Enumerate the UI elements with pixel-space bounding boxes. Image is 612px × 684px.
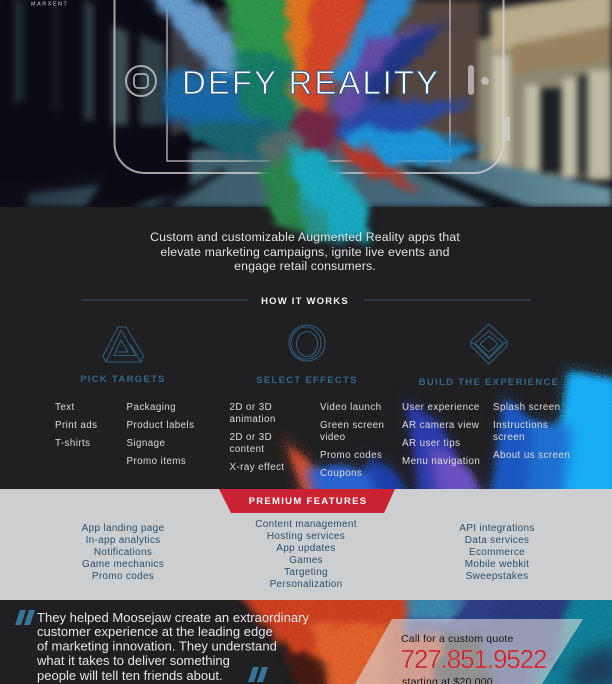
list: premium left: Promo codes xyxy=(92,571,154,582)
testimonial quote: of marketing innovation. They understand xyxy=(37,638,277,654)
list: pick targets: T-shirts xyxy=(55,438,90,449)
headings: steps: PICK TARGETS xyxy=(80,374,166,385)
testimonial quote: what it takes to deliver something xyxy=(36,653,230,668)
list: select effects: animation xyxy=(230,414,276,425)
testimonial quote: They helped Moosejaw create an extraordinary xyxy=(37,610,309,625)
list: select effects: content xyxy=(230,444,265,455)
phone camera and side button xyxy=(468,65,510,141)
list: premium right: Ecommerce xyxy=(469,547,525,558)
list: select effects: 2D or 3D xyxy=(230,432,272,443)
intro text: elevate marketing campaigns, ignite live events and xyxy=(160,245,450,259)
callout text: Call for a custom quote xyxy=(401,633,514,645)
list: pick targets: Packaging xyxy=(126,402,176,413)
list: pick targets: Print ads xyxy=(55,420,97,431)
list: build the experience: About us screen xyxy=(493,450,570,461)
list: build the experience: User experience xyxy=(402,402,480,413)
list: pick targets: Promo items xyxy=(126,456,186,467)
callout text xyxy=(400,633,548,684)
list: premium center: Content management xyxy=(255,519,357,530)
banner: premium features xyxy=(219,489,395,513)
list: select effects: Promo codes xyxy=(320,450,382,461)
headings: steps xyxy=(80,374,559,388)
list: premium center: App updates xyxy=(276,543,336,554)
list: premium left: Game mechanics xyxy=(82,559,164,570)
list: build the experience: Splash screen xyxy=(493,402,561,413)
banner: premium features: PREMIUM FEATURES xyxy=(249,496,367,507)
footer powder background xyxy=(236,600,612,684)
powder explosion xyxy=(138,0,482,242)
list: premium right: Sweepstakes xyxy=(466,571,528,582)
testimonial quote xyxy=(36,610,309,683)
testimonial quote: customer experience at the leading edge xyxy=(37,624,273,639)
testimonial quote: people will tell ten friends about. xyxy=(37,668,223,683)
list: build the experience xyxy=(402,402,570,467)
list: pick targets: Text xyxy=(55,402,75,413)
list: select effects: Green screen xyxy=(320,420,384,431)
phone outline xyxy=(114,0,504,173)
list: build the experience: Menu navigation xyxy=(402,456,480,467)
hero street photo xyxy=(0,0,612,207)
intro text xyxy=(150,230,460,273)
panel: premium features xyxy=(0,489,612,600)
headings: steps: BUILD THE EXPERIENCE xyxy=(419,377,559,388)
list: premium left: App landing page xyxy=(82,523,164,534)
list: select effects: Video launch xyxy=(320,402,382,413)
phone number: 727.851.9522 xyxy=(400,644,548,674)
powder splash behind lists xyxy=(280,368,612,500)
title: Defy Reality: DEFY REALITY xyxy=(182,64,438,101)
list: premium center: Targeting xyxy=(284,567,328,578)
list: select effects xyxy=(230,402,384,479)
list: pick targets: Signage xyxy=(126,438,166,449)
list: select effects: video xyxy=(320,432,346,443)
list: premium center: Hosting services xyxy=(267,531,345,542)
callout panel xyxy=(355,619,583,684)
list: premium center: Games xyxy=(289,555,323,566)
list: build the experience: screen xyxy=(493,432,525,443)
list: select effects: 2D or 3D xyxy=(230,402,272,413)
intro text: engage retail consumers. xyxy=(234,259,376,273)
headings: steps: SELECT EFFECTS xyxy=(256,375,358,386)
list: build the experience: Instructions xyxy=(493,420,548,431)
icon: concentric rings xyxy=(289,325,325,361)
intro text: Custom and customizable Augmented Reality apps that xyxy=(150,230,460,244)
heading: how it works: HOW IT WORKS xyxy=(261,296,349,307)
list: premium left: Notifications xyxy=(94,547,152,558)
list: premium center: Personalization xyxy=(270,579,342,590)
list: select effects: X-ray effect xyxy=(230,462,284,473)
list: pick targets xyxy=(55,402,194,467)
list: premium left xyxy=(82,523,164,582)
list: build the experience: AR user tips xyxy=(402,438,460,449)
list: premium center xyxy=(255,519,357,590)
opening quote mark xyxy=(15,610,35,625)
logo: Marxent: MARXENT xyxy=(31,2,68,8)
list: select effects: Coupons xyxy=(320,468,362,479)
list: premium left: In-app analytics xyxy=(86,535,160,546)
icon: impossible triangle xyxy=(103,327,144,362)
list: build the experience: AR camera view xyxy=(402,420,480,431)
list: premium right: Mobile webkit xyxy=(465,559,529,570)
list: pick targets: Product labels xyxy=(126,420,194,431)
list: premium right: API integrations xyxy=(459,523,535,534)
closing quote mark xyxy=(248,667,268,682)
list: premium right: Data services xyxy=(465,535,529,546)
list: premium right xyxy=(459,523,535,582)
icon: nested diamond xyxy=(471,324,507,364)
